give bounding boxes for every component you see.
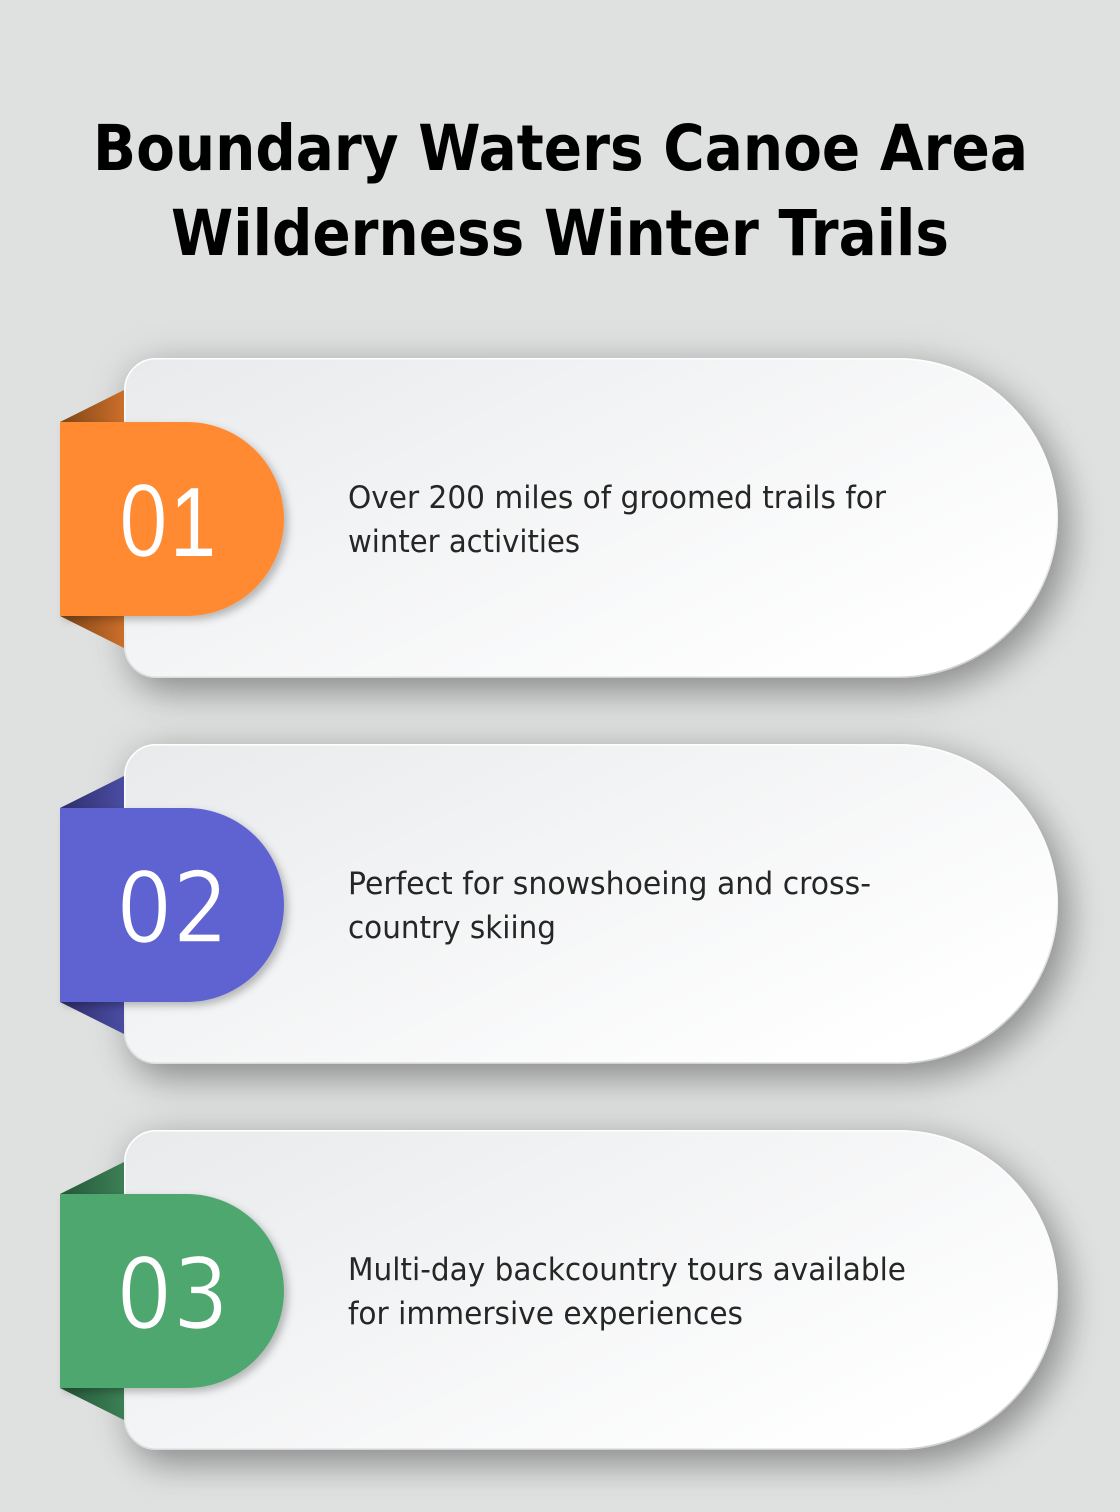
panel: step 02 (60, 745, 1057, 1063)
card 01 (125, 359, 1057, 677)
description 03: Multi-day backcountry tours available (348, 1252, 906, 1288)
number badge 02 (60, 808, 284, 1002)
description 03 (348, 1252, 906, 1332)
description 01 (348, 480, 886, 560)
description 02: country skiing (348, 910, 556, 946)
card 02 (125, 745, 1057, 1063)
number 01: 01 (117, 466, 216, 580)
description 01: Over 200 miles of groomed trails for (348, 480, 886, 516)
ribbon folds 02 (60, 776, 124, 1034)
panel: step 01 (60, 359, 1057, 677)
card 03 (125, 1131, 1057, 1449)
ribbon folds 03 (60, 1162, 124, 1420)
number 02: 02 (116, 852, 229, 966)
description 01: winter activities (348, 524, 580, 560)
title (93, 112, 1028, 270)
number 03: 03 (116, 1238, 229, 1352)
description 03: for immersive experiences (348, 1296, 743, 1332)
description 02: Perfect for snowshoeing and cross- (348, 866, 871, 902)
title: Boundary Waters Canoe Area (93, 112, 1028, 185)
description 02 (348, 866, 871, 946)
number badge 03 (60, 1194, 284, 1388)
title: Wilderness Winter Trails (171, 197, 949, 270)
panel: step 03 (60, 1131, 1057, 1449)
number badge 01 (60, 422, 284, 616)
ribbon folds 01 (60, 390, 124, 648)
